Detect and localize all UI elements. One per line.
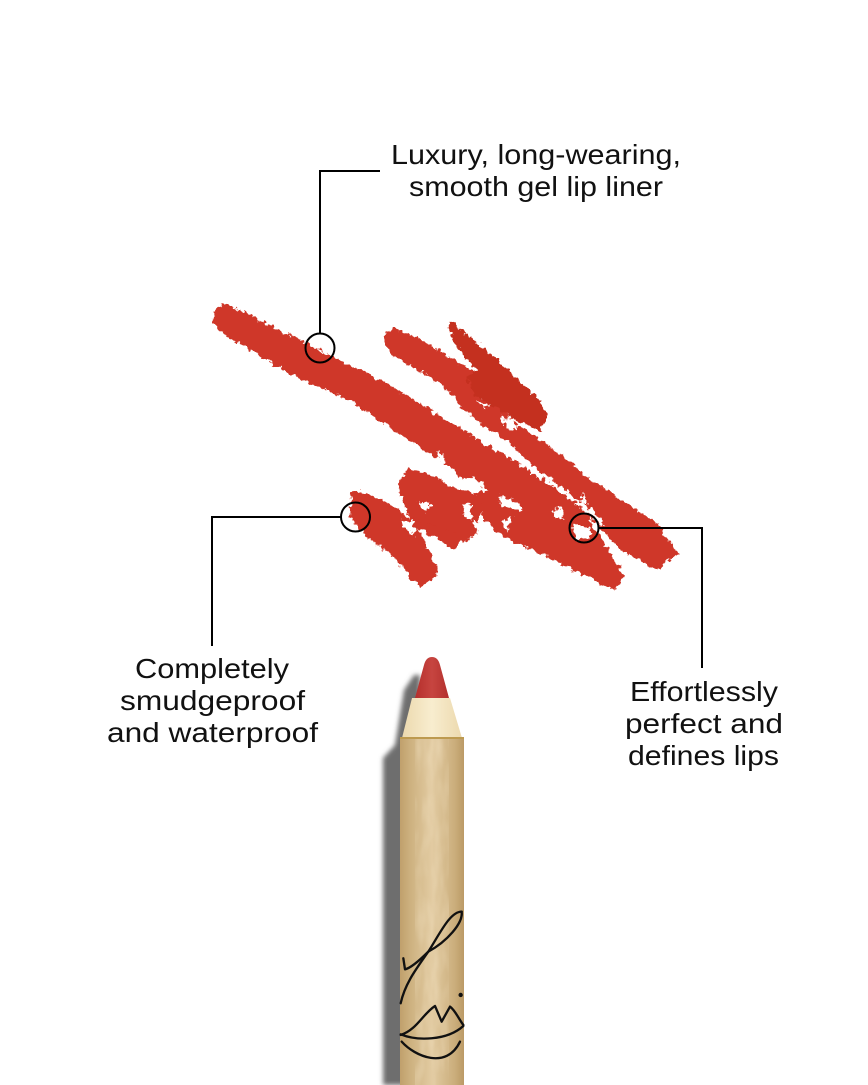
pencil lead — [415, 657, 449, 698]
callout: smudgeproof: and waterproof — [107, 717, 318, 748]
pencil body — [400, 737, 464, 1085]
callout: long-wearing: Luxury, long-wearing, — [391, 139, 681, 170]
callout: defines lips: perfect and — [625, 708, 783, 739]
swatch gaps — [402, 400, 603, 540]
callout: smudgeproof: Completely — [135, 653, 289, 684]
callout: defines lips: defines lips — [628, 740, 779, 771]
lip liner swatch — [212, 303, 678, 590]
second stroke — [383, 328, 678, 570]
callout: smudgeproof: smudgeproof — [120, 685, 305, 716]
callout: long-wearing — [306, 139, 681, 362]
pencil shadow — [383, 675, 420, 1085]
callout: long-wearing: smooth gel lip liner — [409, 171, 663, 202]
pencil — [383, 657, 464, 1085]
pencil wood — [402, 698, 462, 738]
lower middle stroke — [398, 467, 483, 548]
long stroke — [212, 303, 625, 590]
callout: defines lips: Effortlessly — [630, 676, 778, 707]
pencil logo — [401, 912, 463, 1058]
lower left stroke — [350, 491, 457, 588]
upper tip stroke — [447, 323, 547, 430]
callout: smudgeproof — [107, 502, 370, 748]
callout: defines lips — [570, 514, 783, 771]
